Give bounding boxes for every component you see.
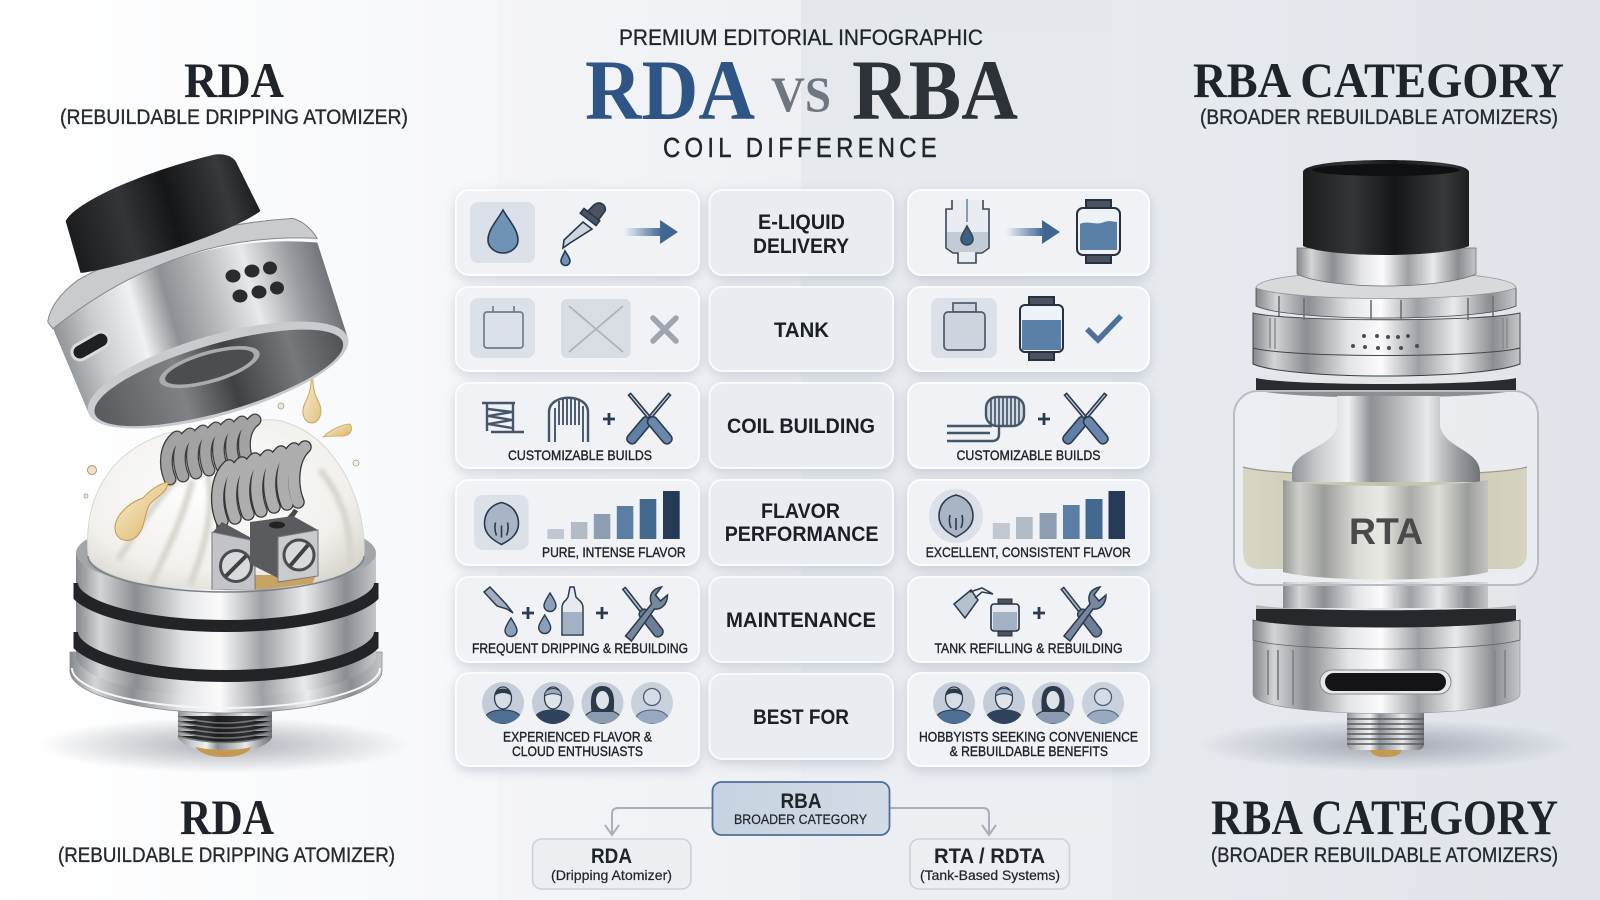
icon: refill tank: [946, 199, 989, 263]
right heading: (BROADER REBUILDABLE ATOMIZERS): [1200, 106, 1558, 129]
label: TANK: [774, 319, 829, 342]
card row: coil building: [456, 383, 1149, 468]
glass tank: [1234, 391, 1538, 585]
air holes: [1351, 334, 1419, 350]
arrow: left connector: [605, 808, 712, 835]
right footer caption: [1211, 789, 1558, 867]
node: RTA / RDTA: (Tank-Based Systems): [920, 867, 1060, 883]
plus: [1033, 607, 1045, 619]
label: [503, 729, 653, 759]
node: RBA: RBA: [780, 790, 822, 813]
cap airflow holes: [226, 262, 284, 302]
threaded post: [178, 700, 272, 757]
category hierarchy diagram: [532, 782, 1070, 889]
icon: coil: [549, 398, 588, 442]
air slot: [1320, 670, 1451, 694]
left footer caption: (REBUILDABLE DRIPPING ATOMIZER): [58, 844, 395, 867]
icon: user group: [933, 682, 1124, 724]
thread: [1347, 708, 1424, 757]
icon: dripping bottle and drops: [484, 587, 583, 636]
arrow: [1006, 220, 1060, 244]
card row: e-liquid delivery: [456, 190, 1149, 275]
bar chart: [993, 491, 1125, 539]
icon: horizontal coil: [947, 397, 1024, 441]
icon: flavor leaf: [474, 495, 529, 550]
left heading: [60, 52, 408, 129]
card row: best for: [456, 673, 1149, 766]
label: [725, 500, 878, 546]
label: MAINTENANCE: [726, 609, 876, 632]
label: EXCELLENT, CONSISTENT FLAVOR: [926, 544, 1131, 560]
o-rings: [72, 583, 380, 676]
rim opening: [76, 516, 376, 590]
right heading: RBA CATEGORY: [1193, 52, 1564, 108]
icon: drop: [470, 202, 535, 263]
icon: crossed tools: [1061, 391, 1110, 446]
icon: crossed box: [561, 299, 630, 358]
RTA mark: RTA: [1349, 511, 1423, 552]
header: title block: [585, 25, 1018, 163]
top cap, tilted: [16, 133, 359, 455]
eyebrow: PREMIUM EDITORIAL INFOGRAPHIC: [619, 25, 983, 50]
label: E-LIQUID: [758, 211, 845, 234]
label: DELIVERY: [753, 235, 849, 258]
label: [753, 211, 849, 258]
node: RBA: BROADER CATEGORY: [734, 812, 867, 827]
drip tip: [59, 146, 264, 276]
label: CUSTOMIZABLE BUILDS: [508, 447, 652, 463]
label: CLOUD ENTHUSIASTS: [512, 743, 643, 759]
card row: maintenance: [456, 577, 1149, 662]
label: [919, 729, 1138, 759]
drip tip: [1303, 160, 1469, 255]
right footer caption: (BROADER REBUILDABLE ATOMIZERS): [1211, 844, 1558, 867]
right heading: [1193, 52, 1564, 129]
icon: user group: [482, 682, 673, 724]
icon: check: [1087, 316, 1121, 340]
icon: filled tank: [1020, 297, 1063, 360]
front rim highlight: [76, 553, 376, 606]
plus: [603, 413, 615, 425]
node: RTA / RDTA: RTA / RDTA: [934, 845, 1045, 868]
top band: [35, 201, 321, 330]
title RDA: RDA: [585, 42, 755, 138]
cap airflow slot: [80, 340, 101, 352]
label: EXPERIENCED FLAVOR &: [503, 729, 653, 745]
front coil: [218, 447, 305, 548]
label: PURE, INTENSE FLAVOR: [542, 544, 686, 560]
liquid on cotton: [115, 482, 168, 540]
arrow: right connector: [890, 808, 996, 835]
chimney: [1292, 396, 1480, 482]
label: HOBBYISTS SEEKING CONVENIENCE: [919, 729, 1138, 745]
title RBA: RBA: [852, 42, 1018, 138]
label: TANK REFILLING & REBUILDING: [934, 640, 1122, 656]
icon: crossed tools: [625, 391, 674, 446]
plus: [596, 607, 608, 619]
title VS: VS: [771, 66, 831, 122]
base: [1253, 640, 1520, 714]
collar: [1297, 248, 1476, 286]
label: & REBUILDABLE BENEFITS: [950, 743, 1108, 759]
cap body: [44, 219, 359, 454]
label: PERFORMANCE: [725, 523, 878, 546]
left footer caption: [58, 789, 395, 867]
node: RTA / RDTA: [910, 839, 1070, 889]
left heading: RDA: [184, 52, 284, 108]
cotton wick: [88, 420, 364, 591]
bar chart: [547, 491, 680, 539]
arrow: [624, 220, 678, 244]
icon: bottle: [931, 298, 997, 358]
label: FREQUENT DRIPPING & REBUILDING: [472, 640, 688, 656]
icon: x mark: [653, 318, 676, 341]
post blocks: [212, 516, 318, 590]
icon: wrench and screwdriver: [620, 585, 668, 641]
right footer caption: RBA CATEGORY: [1211, 789, 1558, 845]
icon: flavor leaf: [929, 489, 983, 543]
label: BEST FOR: [753, 706, 849, 729]
base flange: [70, 652, 382, 713]
liquid: [1243, 467, 1527, 569]
left footer caption: RDA: [180, 789, 274, 845]
droplets: [84, 368, 359, 498]
base body: [76, 553, 376, 697]
lower rings: [1253, 620, 1520, 649]
card row: flavor performance: [456, 480, 1149, 565]
back coil: [166, 420, 255, 479]
subtitle: COIL DIFFERENCE: [663, 132, 941, 163]
icon: full tank: [1077, 200, 1120, 263]
node: RBA: [712, 782, 890, 835]
icon: refill bottle and tank: [954, 588, 1019, 636]
icon: dropper: [561, 203, 605, 266]
label: COIL BUILDING: [727, 415, 875, 438]
node: RDA: RDA: [591, 845, 632, 868]
icon: wire spool: [482, 403, 524, 432]
icon: wrench and screwdriver: [1059, 585, 1106, 641]
card row: tank: [456, 287, 1149, 371]
illustration: RDA atomizer: [47, 154, 390, 770]
upper metal stack: [1256, 375, 1516, 396]
left heading: (REBUILDABLE DRIPPING ATOMIZER): [60, 106, 408, 129]
illustration: RTA tank: [1196, 160, 1576, 771]
plus: [1038, 413, 1050, 425]
node: RDA: [532, 839, 691, 889]
label: CUSTOMIZABLE BUILDS: [956, 447, 1100, 463]
comparison cards: [456, 190, 1149, 766]
node: RDA: (Dripping Atomizer): [551, 867, 672, 883]
top disk: [1256, 288, 1516, 318]
icon: empty outline: [470, 298, 535, 358]
label: FLAVOR: [761, 500, 840, 523]
